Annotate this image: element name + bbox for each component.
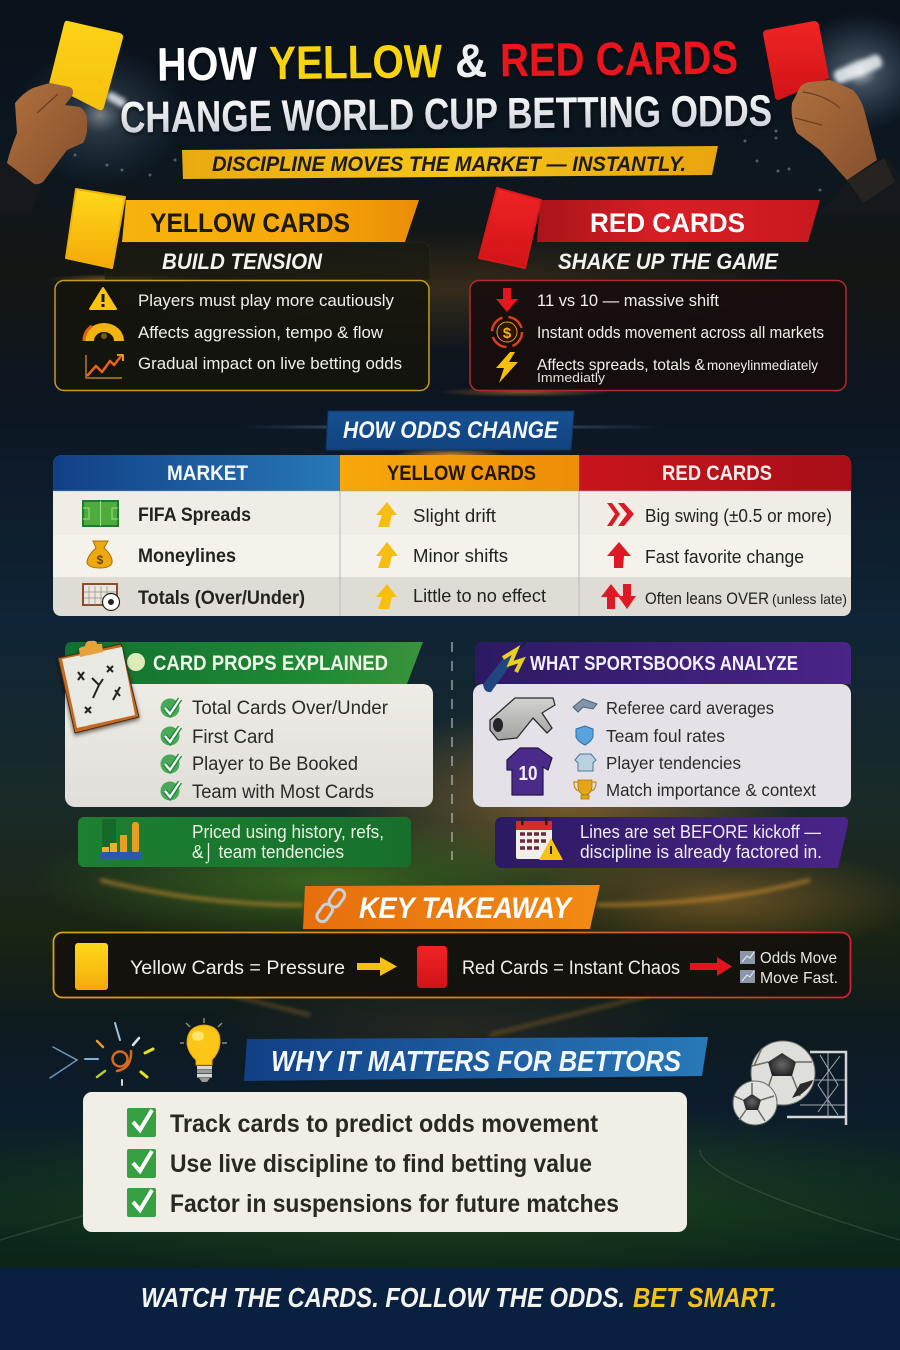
title: HOW <box>157 36 258 91</box>
text: instant odds: Instant odds movement across all markets <box>537 323 824 342</box>
text: moneyline overlap: moneylinmediately <box>707 358 818 373</box>
item: live discipline: Use live discipline to find betting value <box>170 1150 592 1178</box>
icon: money bag <box>87 541 112 568</box>
text: tendencies: &⌡ team tendencies <box>192 842 344 864</box>
item: referee averages: Referee card averages <box>606 698 774 718</box>
text: cautious play: Players must play more cautiously <box>138 291 394 310</box>
banner: why it matters <box>244 1037 708 1081</box>
icon: lanyard handle <box>483 638 530 692</box>
banner: key takeaway: KEY TAKEAWAY <box>359 892 574 925</box>
banner: how odds change: HOW ODDS CHANGE <box>343 417 559 444</box>
item: first card: First Card <box>192 727 274 748</box>
column header: yellow cards: YELLOW CARDS <box>387 462 536 485</box>
text: before kickoff: Lines are set BEFORE kickoff — <box>580 822 821 842</box>
item: player tendencies: Player tendencies <box>606 753 741 773</box>
item: team foul rates: Team foul rates <box>606 726 725 746</box>
footer banner <box>0 1268 900 1350</box>
text: odds move: Odds Move <box>760 950 837 967</box>
footer banner: WATCH THE CARDS. FOLLOW THE ODDS. <box>141 1282 625 1313</box>
panel: key takeaway summary <box>54 932 850 998</box>
text: yellow equals pressure: Yellow Cards = Pressure <box>130 958 345 979</box>
text: often leans over: Often leans OVER <box>645 589 769 608</box>
text: discipline factored: discipline is already factored in. <box>580 842 822 862</box>
panel: yellow cards <box>55 189 430 390</box>
column header: red cards <box>579 455 851 491</box>
footer banner: BET SMART. <box>633 1282 777 1313</box>
item: suspensions: Factor in suspensions for future matches <box>170 1190 619 1218</box>
column header: market: MARKET <box>167 462 248 485</box>
banner: sportsbooks: WHAT SPORTSBOOKS ANALYZE <box>530 653 798 675</box>
text: unless late: (unless late) <box>772 591 847 607</box>
text: big swing: Big swing (±0.5 or more) <box>645 506 832 526</box>
title: & <box>455 34 487 87</box>
icon: red up arrow <box>607 542 631 568</box>
icon: jersey <box>507 748 552 795</box>
text: slight drift: Slight drift <box>413 506 496 526</box>
icon: yellow card <box>75 943 108 990</box>
text: numbers shift: 11 vs 10 — massive shift <box>537 291 719 310</box>
column header: yellow cards <box>340 455 579 491</box>
icon: light bulb <box>180 1018 227 1082</box>
panel: card props explained <box>58 641 433 807</box>
icon: goal and ball <box>83 584 120 610</box>
list card: card props <box>65 684 433 807</box>
label: FIFA spreads: FIFA Spreads <box>138 505 251 526</box>
text: priced using: Priced using history, refs, <box>192 822 384 842</box>
icon: speedometer <box>84 323 124 341</box>
label: totals: Totals (Over/Under) <box>138 588 305 609</box>
table: how odds change <box>53 455 851 616</box>
icon: tactics clipboard <box>58 641 139 733</box>
icon: whistle <box>490 698 555 740</box>
arrow: red <box>690 957 732 976</box>
panel: what sportsbooks analyze <box>473 638 851 807</box>
arrow: yellow <box>357 957 397 976</box>
title: RED CARDS <box>500 30 738 86</box>
icon: odds move chart <box>740 951 755 964</box>
icon: up and down arrows <box>601 584 636 609</box>
icon: red card <box>479 188 541 268</box>
banner: why it matters: WHY IT MATTERS FOR BETTORS <box>271 1046 682 1078</box>
icon: money bag: $ <box>97 553 104 567</box>
column header: market <box>53 455 340 491</box>
icon: red card <box>417 946 447 988</box>
text: little effect: Little to no effect <box>413 586 546 606</box>
icon: footballs and goal <box>733 1041 846 1125</box>
banner: red cards <box>537 200 820 242</box>
icon: sparkle whistle <box>50 1023 153 1085</box>
item: most cards: Team with Most Cards <box>192 782 374 803</box>
list box: yellow card effects <box>55 280 429 390</box>
icon: double chevrons <box>607 503 634 526</box>
label: moneylines: Moneylines <box>138 546 236 567</box>
icon: pitch <box>83 501 118 526</box>
icon: dollar cycle: $ <box>503 325 512 342</box>
text: red equals chaos: Red Cards = Instant Chaos <box>462 958 680 979</box>
icon: yellow up arrow <box>376 542 398 568</box>
banner: yellow cards <box>122 200 419 242</box>
title <box>120 30 772 142</box>
subtitle banner: DISCIPLINE MOVES THE MARKET — INSTANTLY. <box>212 153 686 176</box>
text: gradual impact: Gradual impact on live betting odds <box>138 354 402 373</box>
column header: red cards: RED CARDS <box>662 462 772 485</box>
icon: lightning <box>496 352 518 383</box>
item: total cards: Total Cards Over/Under <box>192 698 389 719</box>
banner: key takeaway <box>303 885 600 929</box>
row: FIFA spreads <box>83 501 832 527</box>
icon: calendar warning <box>516 817 563 860</box>
text: move fast: Move Fast. <box>760 970 838 987</box>
divider line <box>451 642 453 860</box>
item: match importance: Match importance & context <box>606 780 816 800</box>
panel: why it matters list <box>83 1092 687 1232</box>
heading: shake up the game: SHAKE UP THE GAME <box>558 249 779 274</box>
list box: red card effects <box>470 280 846 390</box>
text: aggression: Affects aggression, tempo & flow <box>138 323 384 342</box>
icon: move fast chart <box>740 970 755 983</box>
icon: left hand holding yellow card <box>0 21 123 215</box>
item: track cards: Track cards to predict odds movement <box>170 1110 599 1138</box>
text: spreads totals: Affects spreads, totals & <box>537 357 705 374</box>
banner: card props <box>65 642 423 684</box>
icon: chain link <box>315 887 347 924</box>
panel: red cards <box>470 188 846 390</box>
row: moneylines <box>87 541 804 568</box>
text: fast favorite: Fast favorite change <box>645 547 804 567</box>
icon: jersey: 10 <box>518 763 538 785</box>
icon: right hand holding red card <box>763 21 900 215</box>
icon: dollar cycle <box>492 317 522 347</box>
text: immediately: Immediatly <box>537 370 606 385</box>
banner: card props: CARD PROPS EXPLAINED <box>153 652 388 675</box>
banner: yellow cards: YELLOW CARDS <box>150 208 350 238</box>
icon: rising chart <box>86 355 123 378</box>
icon: yellow card <box>66 189 125 268</box>
banner: sportsbooks <box>475 642 851 684</box>
title: YELLOW <box>269 34 443 89</box>
banner: how odds change <box>240 411 660 450</box>
icon: bar chart <box>100 819 142 859</box>
item: first card <box>160 726 274 748</box>
banner: red cards: RED CARDS <box>590 208 745 238</box>
heading: build tension: BUILD TENSION <box>162 249 323 274</box>
icon: warning triangle <box>90 288 116 309</box>
icon: down arrow <box>496 288 518 312</box>
callout: pricing note <box>78 817 411 867</box>
subtitle banner <box>182 146 718 179</box>
icon: yellow up arrow <box>376 502 397 527</box>
text: minor shifts: Minor shifts <box>413 546 508 566</box>
list card: sportsbooks <box>473 684 851 807</box>
icon: yellow up arrow <box>376 584 397 609</box>
item: player booked: Player to Be Booked <box>192 754 358 775</box>
callout: lines note <box>495 817 848 868</box>
row: totals <box>83 584 847 610</box>
